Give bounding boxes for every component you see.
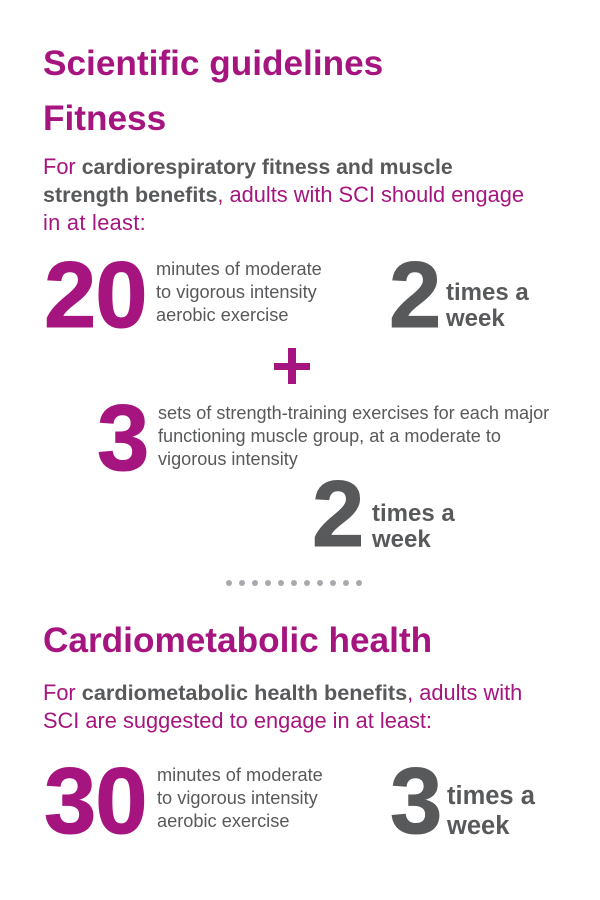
number: 2 times (strength): 2 — [312, 461, 364, 566]
text block: times a week (cardiometabolic): times a — [447, 782, 535, 810]
text block: 3 sets description: vigorous intensity — [158, 449, 298, 469]
icon: plus — [274, 348, 310, 384]
text block: times a week (strength): times a — [372, 500, 455, 527]
number: 30 minutes: 30 — [44, 748, 147, 853]
number: 20 minutes: 20 — [44, 242, 147, 347]
text block: 20 minutes description — [156, 259, 322, 325]
text block: fitness intro — [43, 154, 524, 235]
text block: 3 sets description: sets of strength-training exercises for each major — [158, 403, 549, 423]
text block: 30 minutes description: to vigorous intensity — [157, 788, 318, 808]
text block: times a week: times a — [446, 279, 529, 306]
text block: 20 minutes description: to vigorous intensity — [156, 282, 317, 302]
text block: 3 sets description: functioning muscle group, at a moderate to — [158, 426, 501, 446]
number: 3 sets: 3 — [97, 385, 149, 490]
divider: dotted row — [226, 580, 362, 586]
text block: times a week: week — [446, 304, 505, 332]
text block: cardiometabolic intro: For cardiometabolic health benefits, adults with — [43, 680, 522, 705]
text block: 20 minutes description: minutes of moderate — [156, 259, 322, 279]
title: Scientific guidelines: Scientific guidelines — [43, 44, 383, 83]
text block: times a week (strength) — [372, 500, 455, 552]
text block: fitness intro: strength benefits, adults with SCI should engage — [43, 182, 524, 207]
text block: 30 minutes description — [157, 765, 323, 831]
text block: cardiometabolic intro — [43, 680, 522, 733]
text block: fitness intro: For cardiorespiratory fitness and muscle — [43, 154, 453, 179]
text block: 30 minutes description: aerobic exercise — [157, 811, 289, 831]
text block: cardiometabolic intro: SCI are suggested to engage in at least: — [43, 708, 432, 733]
number: 3 times: 3 — [390, 748, 442, 853]
text block: times a week (cardiometabolic) — [446, 782, 536, 840]
text block: times a week — [446, 279, 529, 332]
text block: 30 minutes description: minutes of moderate — [157, 765, 323, 785]
text block: 3 sets description — [158, 403, 549, 469]
text block: times a week (strength): week — [372, 526, 431, 552]
text block: times a week (cardiometabolic): week — [447, 812, 509, 840]
text block: fitness intro: in at least: — [43, 210, 146, 235]
text block: 20 minutes description: aerobic exercise — [156, 305, 288, 325]
heading: Fitness: Fitness — [43, 99, 166, 138]
number: 2 times: 2 — [389, 242, 441, 347]
heading: Cardiometabolic health: Cardiometabolic health — [43, 621, 432, 660]
